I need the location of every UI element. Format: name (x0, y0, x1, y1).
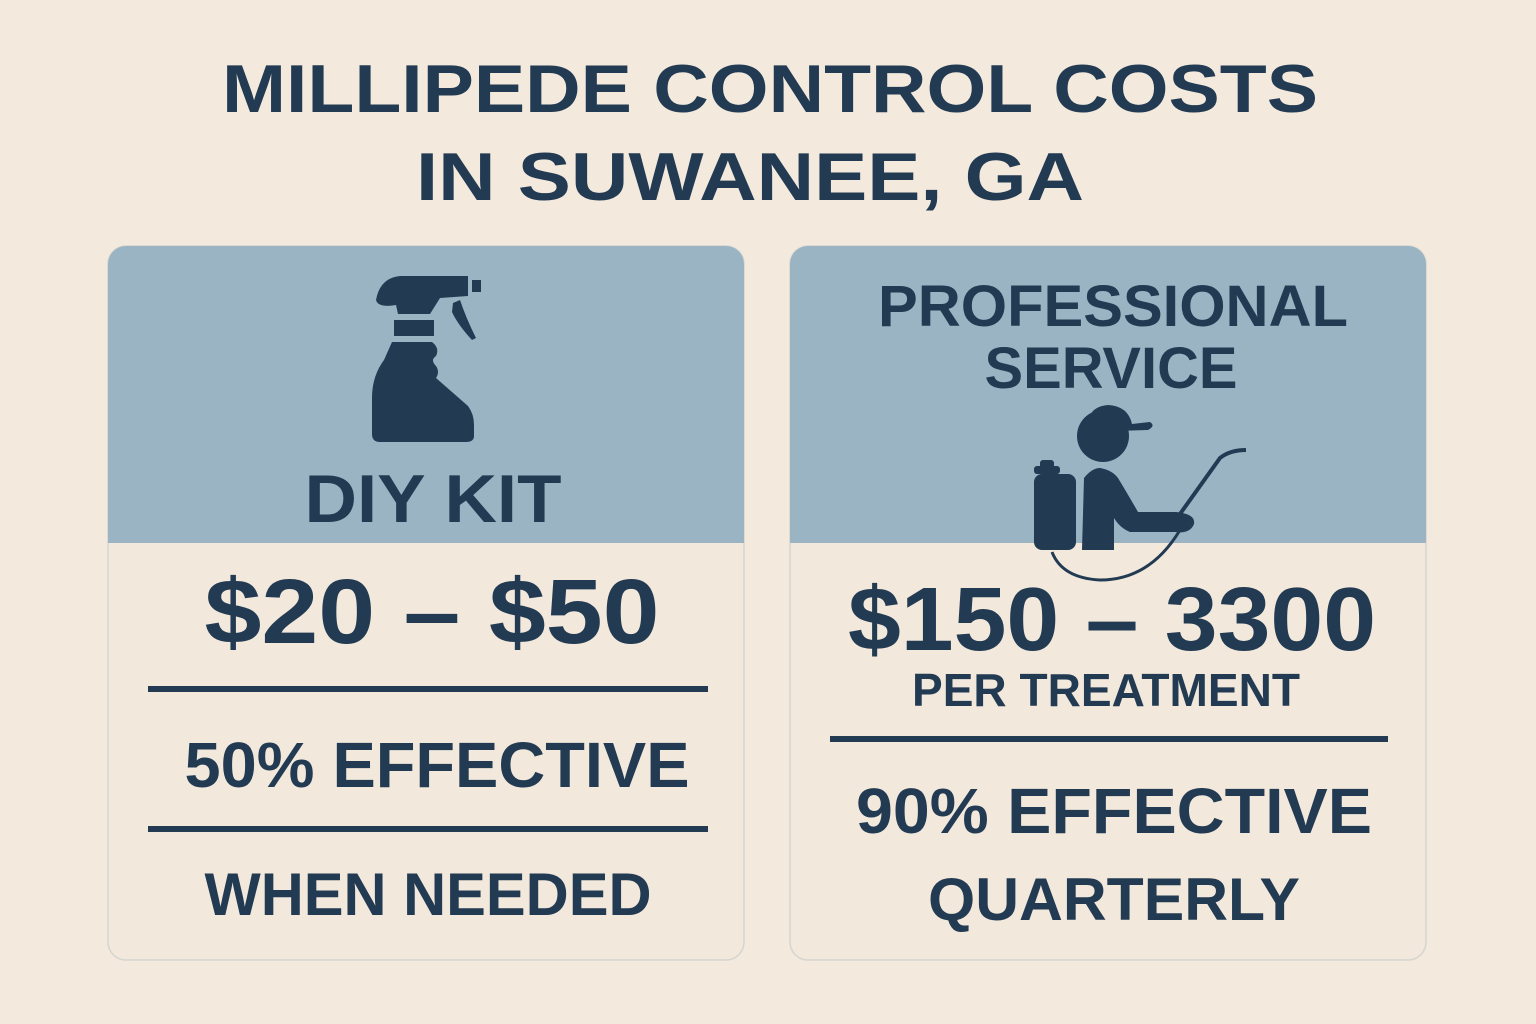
panel: professional service (790, 246, 1426, 960)
heading: professional service (878, 274, 1348, 401)
icon: spray bottle (372, 276, 481, 442)
price: $150 – 3300 (848, 570, 1376, 670)
heading: professional service: PROFESSIONAL (878, 274, 1348, 339)
title: MILLIPEDE CONTROL COSTS (222, 51, 1318, 127)
title: IN SUWANEE, GA (416, 139, 1084, 215)
title (222, 51, 1318, 215)
effectiveness: 50% EFFECTIVE (184, 729, 690, 801)
icon: exterminator with sprayer (1034, 405, 1246, 580)
frequency: WHEN NEEDED (204, 861, 652, 928)
price unit: PER TREATMENT (912, 664, 1300, 716)
effectiveness: 90% EFFECTIVE (856, 775, 1372, 847)
heading: DIY KIT: DIY KIT (304, 461, 562, 537)
frequency: QUARTERLY (928, 866, 1300, 933)
panel: DIY kit (108, 246, 744, 960)
heading: professional service: SERVICE (984, 336, 1238, 401)
price: $20 – $50 (204, 561, 660, 663)
